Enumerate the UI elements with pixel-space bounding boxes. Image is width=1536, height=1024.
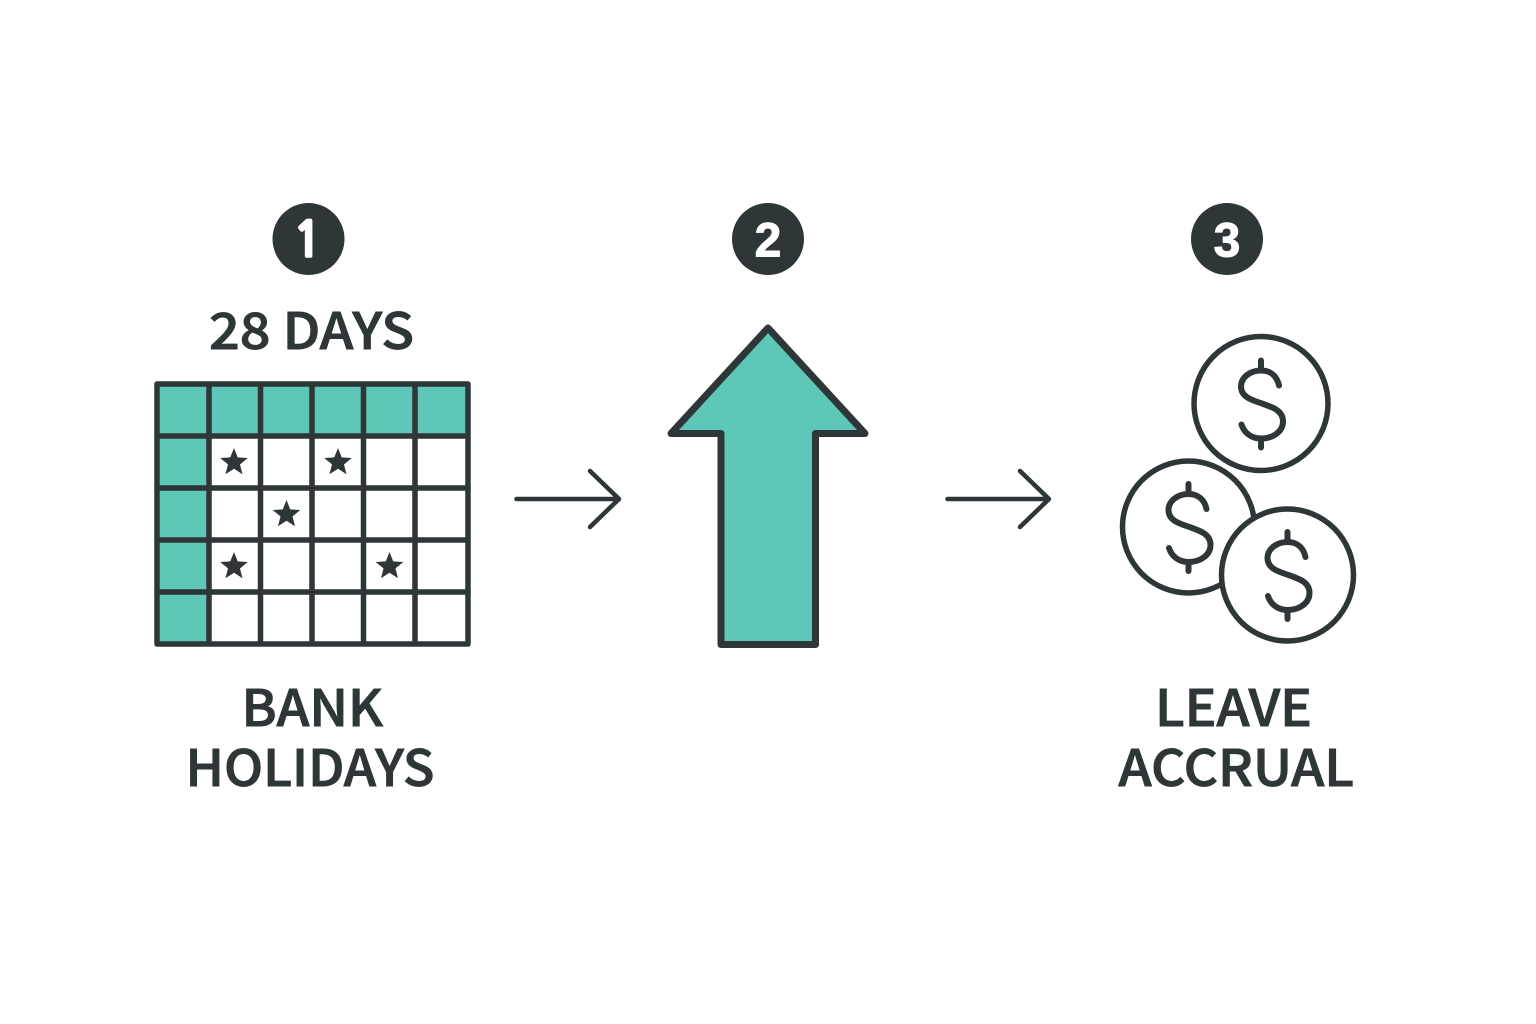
heading: 28 days: 28 DAYS xyxy=(209,292,414,364)
step 1 column xyxy=(157,203,468,801)
step 2 column xyxy=(671,203,865,644)
number badge 1 xyxy=(272,203,344,275)
label: leave accrual: LEAVE xyxy=(1155,669,1312,741)
icon: right coin xyxy=(1222,509,1354,641)
icon: left coin xyxy=(1122,461,1254,593)
icon: top coin xyxy=(1194,336,1328,470)
number badge 2: 2 xyxy=(755,214,781,268)
icon: star xyxy=(376,552,403,578)
arrow: step 1 to step 2 xyxy=(516,471,619,527)
label: bank holidays: BANK xyxy=(242,669,384,741)
label: bank holidays: HOLIDAYS xyxy=(186,729,434,801)
icon: large upward arrow xyxy=(671,328,865,644)
label: leave accrual xyxy=(1118,669,1354,801)
label: leave accrual: ACCRUAL xyxy=(1118,729,1354,801)
icon: stack of dollar coins xyxy=(1122,336,1354,641)
icon: star xyxy=(220,552,248,578)
number badge 3 xyxy=(1191,203,1263,275)
label: bank holidays xyxy=(186,669,434,801)
icon: star xyxy=(273,500,300,526)
number badge 1: 1 xyxy=(293,218,322,264)
number badge 2 xyxy=(732,203,804,275)
icon: star xyxy=(324,448,352,474)
icon: star xyxy=(220,448,248,474)
number badge 3: 3 xyxy=(1214,214,1240,268)
arrow: step 2 to step 3 xyxy=(948,471,1049,527)
step 3 column xyxy=(1118,203,1354,801)
icon: calendar grid with starred holidays xyxy=(157,384,468,644)
